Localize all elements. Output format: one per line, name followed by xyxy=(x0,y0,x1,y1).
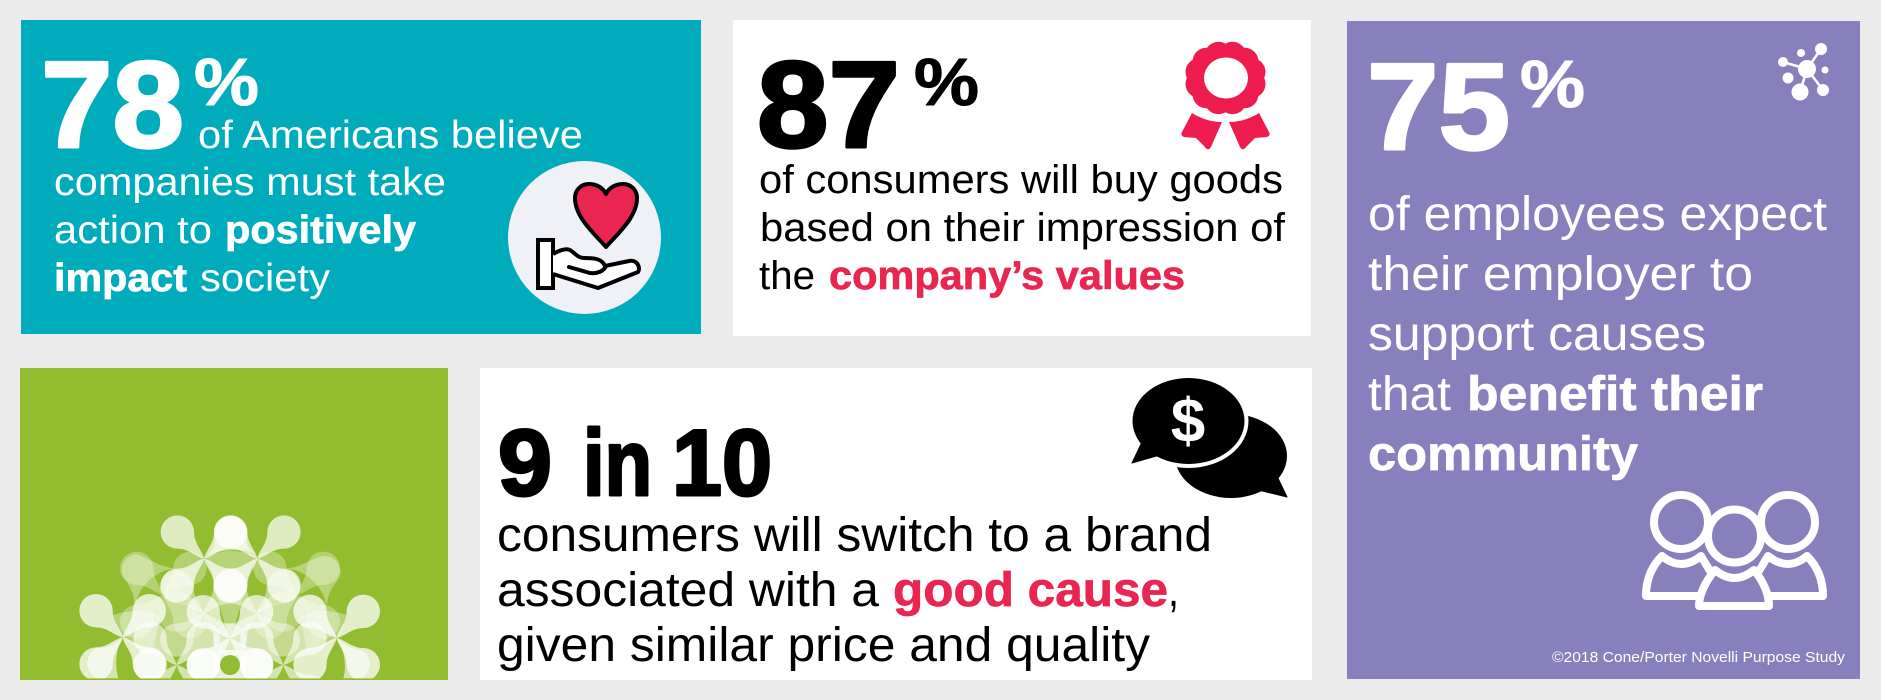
stat: 9 in 10 xyxy=(498,410,772,515)
text block: employees expect: that xyxy=(1368,368,1451,421)
text block: switch to a brand: , xyxy=(1168,564,1179,617)
text block: switch to a brand: given similar price and quality xyxy=(497,619,1150,672)
text block: employees expect: their employer to xyxy=(1368,248,1753,301)
icon: network nodes xyxy=(1778,43,1829,100)
text block: employees expect: of employees expect xyxy=(1368,188,1827,241)
stat: 78%: % xyxy=(194,45,259,120)
panel: 78% of Americans xyxy=(21,20,701,334)
icon: heart in hand xyxy=(508,161,661,314)
text block: consumers buy goods: the xyxy=(759,254,815,298)
text block: employees expect xyxy=(1368,188,1827,481)
text block: employees expect: benefit their xyxy=(1467,368,1763,421)
text block: Americans believe: impact xyxy=(54,257,187,300)
panel: 9 in 10 consumers xyxy=(480,368,1312,680)
text block: consumers buy goods: of consumers will buy goods xyxy=(759,158,1283,202)
panel: 75% of employees xyxy=(1347,21,1860,679)
text block: switch to a brand: associated with a xyxy=(497,564,879,617)
text block: switch to a brand: consumers will switch to a brand xyxy=(497,509,1212,562)
text block: consumers buy goods: company’s values xyxy=(829,254,1185,298)
stat: 78%: 78 xyxy=(41,37,184,174)
stat: 9 in 10: 9 xyxy=(498,410,552,515)
icon: speech bubbles with dollar xyxy=(1128,374,1287,498)
text block: switch to a brand xyxy=(497,509,1212,672)
panel: 87% of consumers xyxy=(733,20,1311,336)
stat: 87%: 87 xyxy=(757,37,900,174)
stat: 75%: % xyxy=(1520,47,1585,122)
text block: employees expect: support causes xyxy=(1368,308,1706,361)
text block: Americans believe: positively xyxy=(225,209,416,252)
stat: 75%: 75 xyxy=(1367,39,1510,176)
stat: 9 in 10: 10 xyxy=(672,410,772,515)
stat: 75% xyxy=(1367,39,1585,176)
icon: three people xyxy=(1646,495,1823,606)
stat: 87%: % xyxy=(914,45,979,120)
source credit: ©2018 Cone/Porter Novelli Purpose Study xyxy=(1552,650,1846,666)
text block: consumers buy goods: based on their impression of xyxy=(760,206,1286,250)
molecular pattern xyxy=(79,515,380,678)
icon: award ribbon xyxy=(1181,42,1270,149)
icon: speech bubbles with dollar: $ xyxy=(1171,387,1205,456)
text block: consumers buy goods xyxy=(759,158,1286,298)
stat: 9 in 10: in xyxy=(583,410,652,515)
panel: green pattern xyxy=(20,368,448,700)
text block: Americans believe: action to xyxy=(54,209,212,252)
stat: 87% xyxy=(757,37,979,174)
text block: employees expect: community xyxy=(1368,428,1638,481)
stat: 78% xyxy=(41,37,259,174)
text block: Americans believe: companies must take xyxy=(54,161,446,204)
text block: Americans believe xyxy=(54,114,583,300)
text block: Americans believe: of Americans believe xyxy=(198,114,583,157)
text block: switch to a brand: good cause xyxy=(893,564,1168,617)
text block: Americans believe: society xyxy=(200,257,331,300)
